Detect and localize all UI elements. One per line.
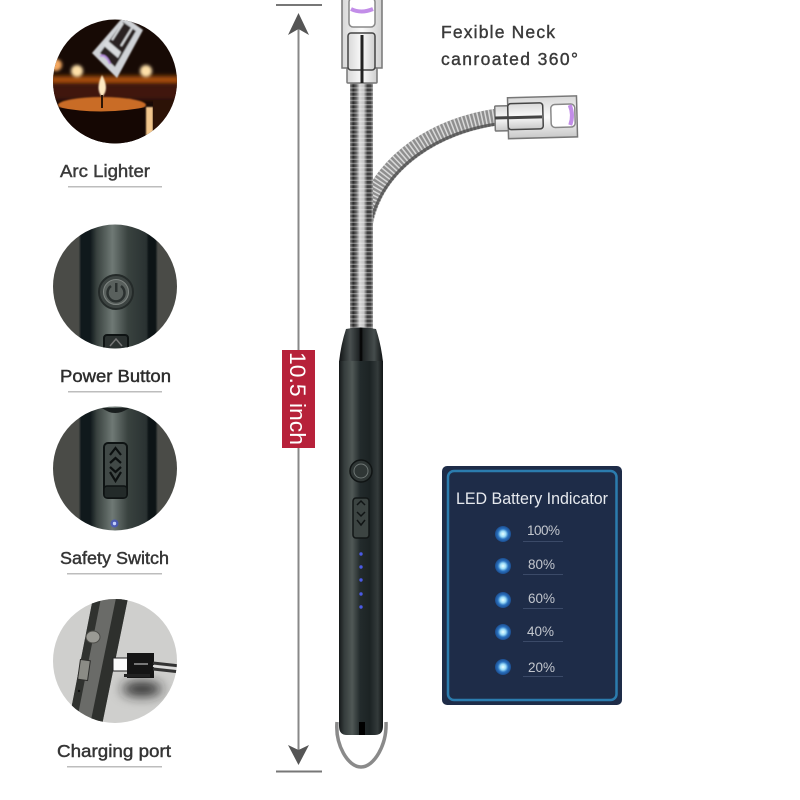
LED indicator dots on handle (359, 552, 363, 609)
panel: charging port feature (50, 595, 180, 768)
level: 40%: 40% (527, 624, 554, 639)
callout: flexible neck: canroated 360° (441, 49, 578, 69)
safety switch on handle (353, 498, 369, 538)
callout: flexible neck: Fexible Neck (441, 22, 555, 42)
flexible neck bent position (364, 117, 497, 226)
level: 100% (495, 523, 563, 542)
callout: flexible neck (441, 22, 578, 69)
label: Charging port: Charging port (57, 741, 171, 761)
level: 20% (495, 659, 563, 677)
panel title: LED Battery Indicator (456, 489, 608, 508)
panel: power button feature (50, 220, 180, 392)
label: Arc Lighter: Arc Lighter (60, 161, 150, 181)
dimension arrow: 10.5 inch height (276, 4, 322, 772)
panel: LED battery indicator (442, 466, 622, 705)
level: 80%: 80% (528, 557, 555, 572)
photo: power button close-up (53, 224, 177, 348)
badge: 10.5 inch: 10.5 inch (285, 352, 310, 445)
photo: USB cable entering port (53, 599, 177, 723)
level: 80% (495, 557, 563, 575)
badge: 10.5 inch (282, 350, 315, 448)
lighter head (92, 16, 143, 78)
level: 100%: 100% (527, 523, 560, 538)
photo: safety switch close-up (53, 406, 177, 530)
lighter product illustration (337, 0, 578, 767)
photo: lighter igniting a candle (53, 20, 177, 144)
panel: safety switch feature (50, 400, 180, 574)
lighter head bent position (494, 96, 578, 139)
panel: arc lighter feature (50, 15, 183, 188)
level: 60% (495, 591, 563, 609)
power button on handle (350, 460, 372, 482)
lighter head straight position (342, 0, 382, 83)
metal hanging ring (337, 722, 386, 767)
level: 60%: 60% (528, 591, 555, 606)
label: Power Button: Power Button (60, 366, 171, 386)
level: 20%: 20% (528, 660, 555, 675)
label: Safety Switch: Safety Switch (60, 548, 169, 568)
level: 40% (495, 624, 563, 642)
lighter handle (339, 328, 383, 735)
flexible neck straight position (350, 83, 373, 333)
